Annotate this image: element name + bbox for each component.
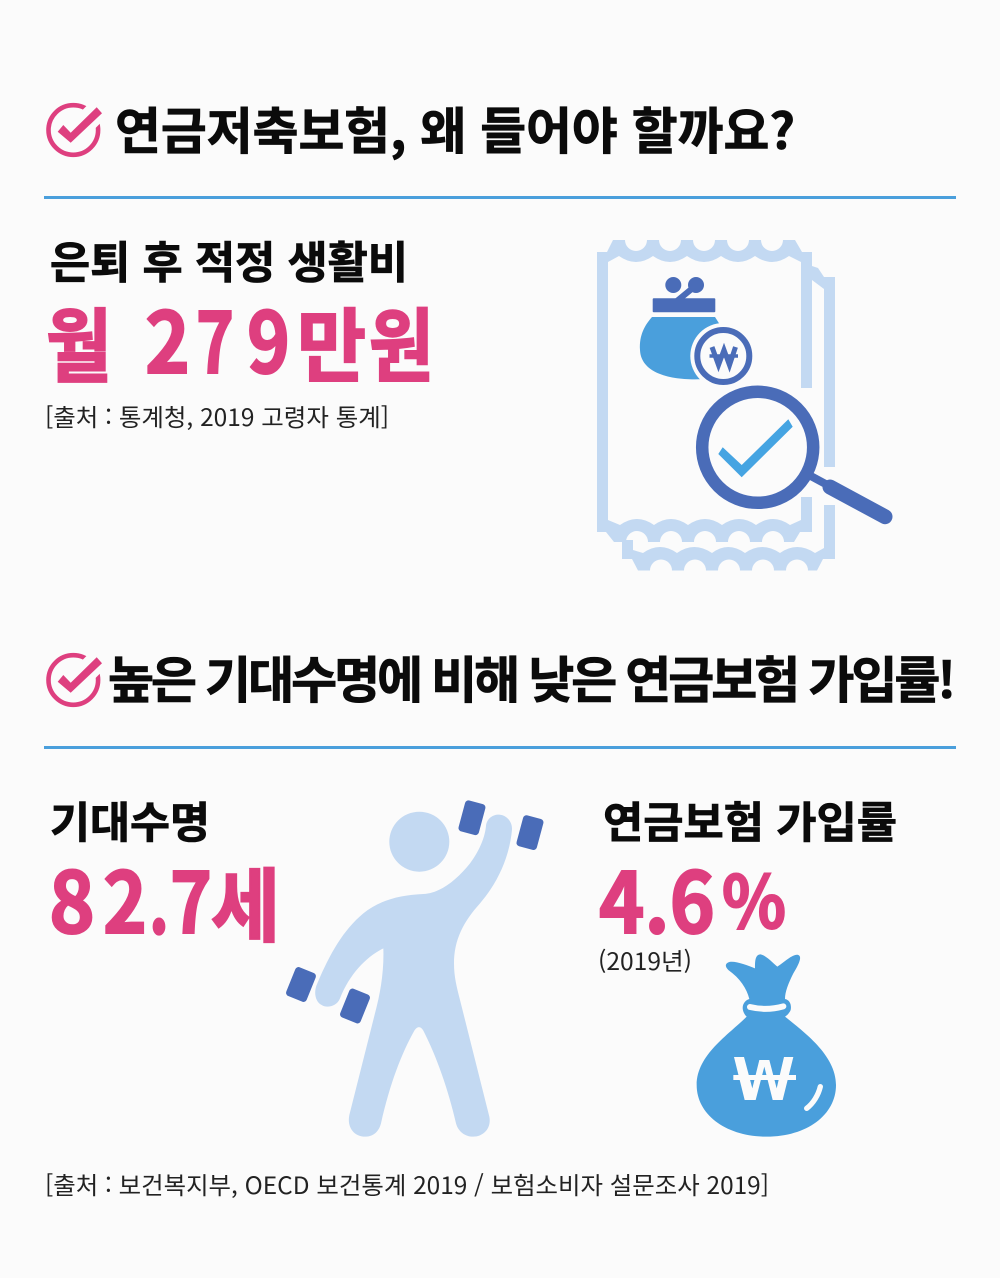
stat: monthly 2.79 million won: 만 [297,283,366,399]
icon: check mark 2 [49,652,106,705]
icon: receipts with wallet and magnifier [597,240,885,570]
label: retirement living cost: 은퇴 후 적정 생활비 [50,227,408,291]
stat: 82.7 years: 7 [170,837,212,958]
front receipt [597,240,812,542]
back receipt [622,266,835,570]
icon: money bag [697,954,836,1137]
icon: check mark 1 [49,102,106,155]
stat: monthly 2.79 million won: 9 [247,277,290,398]
stat: monthly 2.79 million won: 7 [196,277,234,398]
stat: 82.7 years: 2 [103,837,147,958]
stat: 4.6 percent: 4.6 [599,837,715,958]
stat: 82.7 years: . [149,837,169,958]
source note 1: [출처 : 통계청, 2019 고령자 통계] [45,398,389,433]
stat: 4.6 percent: % [722,844,786,949]
heading: section 2: 높은 기대수명에 비해 낮은 연금보험 가입률! [108,641,953,713]
magnifier [702,392,885,517]
note: 2019: (2019년) [598,942,692,977]
icon: person lifting dumbbells [285,800,544,1137]
label: life expectancy: 기대수명 [50,789,210,851]
stat: monthly 2.79 million won: 2 [145,277,190,398]
wallet [640,277,756,389]
source note 2: [출처 : 보건복지부, OECD 보건통계 2019 / 보험소비자 설문조사 2019] [45,1166,769,1201]
label: pension insurance enrollment: 연금보험 가입률 [603,789,897,851]
stat: monthly 2.79 million won: 원 [369,283,434,399]
stat: 82.7 years: 세 [211,843,280,959]
heading: section 1: 연금저축보험, 왜 들어야 할까요? [115,92,795,164]
stat: monthly 2.79 million won: 월 [46,283,112,399]
stat: 82.7 years: 8 [49,837,95,958]
